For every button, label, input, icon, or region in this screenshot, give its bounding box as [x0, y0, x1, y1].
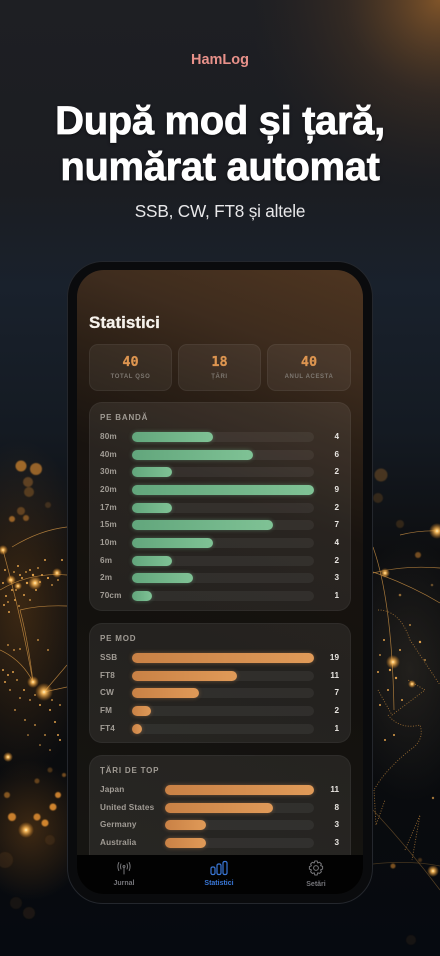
city dots: [2, 559, 434, 799]
panel: top countries: Australia: [100, 838, 136, 847]
panel: top countries: ȚĂRI DE TOP: [100, 766, 159, 775]
subtitle: SSB, CW, FT8 și altele: [135, 201, 305, 221]
icon: antenna: [117, 862, 131, 874]
panel: by mode: PE MOD: [100, 634, 136, 643]
stat card: this year: 40: [301, 354, 317, 370]
panel: by band: 70cm: [100, 591, 122, 600]
headline: numărat automat: [60, 145, 380, 189]
panel: by band: 6: [334, 450, 339, 459]
headline: [55, 99, 385, 189]
panel: by mode: FT8: [100, 671, 115, 680]
stat card: countries: [178, 344, 261, 391]
stat card: this year: ANUL ACESTA: [285, 374, 333, 380]
panel: by mode: 19: [330, 653, 339, 662]
stat card: total QSO: [89, 344, 172, 391]
panel: by band: 15m: [100, 520, 117, 529]
panel: by band: 2: [334, 503, 339, 512]
panel: by mode: FM: [100, 706, 112, 715]
tab: Statistici (active): Statistici: [204, 880, 234, 886]
stat card: total QSO: TOTAL QSO: [111, 374, 150, 380]
phone frame: [67, 261, 373, 904]
stat card: countries: 18: [211, 354, 228, 370]
panel: by band: 6m: [100, 556, 112, 565]
panel: top countries: 11: [330, 785, 339, 794]
panel: by band: 30m: [100, 467, 117, 476]
panel: by band: 1: [334, 591, 339, 600]
screen title: Statistici: [89, 313, 160, 332]
bokeh lights: [0, 460, 422, 945]
panel: by mode: 1: [334, 724, 339, 733]
panel: by mode: SSB: [100, 653, 117, 662]
panel: top countries: 3: [334, 820, 339, 829]
brand name: HamLog: [191, 52, 249, 68]
tab: Jurnal: Jurnal: [113, 880, 134, 886]
panel: top countries: Germany: [100, 820, 137, 829]
panel: by mode: [89, 623, 351, 743]
icon: gear: [308, 860, 324, 876]
panel: by band: 3: [334, 573, 339, 582]
tab: Statistici (active): [204, 860, 234, 886]
panel: by band: 2m: [100, 573, 112, 582]
tab: Jurnal: [113, 862, 134, 886]
panel: by mode: FT4: [100, 724, 115, 733]
panel: top countries: 3: [334, 838, 339, 847]
panel: by band: 4: [334, 538, 339, 547]
panel: by mode: 7: [334, 688, 339, 697]
panel: by mode: CW: [100, 688, 114, 697]
panel: by mode: 2: [334, 706, 339, 715]
panel: by band: PE BANDĂ: [100, 413, 148, 422]
tab bar: [77, 855, 363, 894]
icon: bar chart: [210, 860, 228, 876]
panel: by band: 4: [334, 432, 339, 441]
panel: top countries: United States: [100, 803, 154, 812]
panel: by band: 80m: [100, 432, 117, 441]
panel: by band: 9: [334, 485, 339, 494]
panel: by band: 2: [334, 556, 339, 565]
stat card: this year: [267, 344, 351, 391]
panel: by band: 7: [334, 520, 339, 529]
stat card: countries: ȚĂRI: [211, 374, 228, 380]
headline: După mod și țară,: [55, 99, 385, 143]
panel: top countries: [89, 755, 351, 855]
tab: Setari: [306, 860, 326, 888]
panel: top countries: Japan: [100, 785, 124, 794]
panel: top countries: 8: [334, 803, 339, 812]
panel: by band: 10m: [100, 538, 117, 547]
panel: by band: 40m: [100, 450, 117, 459]
tab: Setari: Setări: [306, 880, 326, 888]
panel: by band: 17m: [100, 503, 117, 512]
panel: by band: 2: [334, 467, 339, 476]
stat card: total QSO: 40: [122, 354, 139, 370]
panel: by band: [89, 402, 351, 611]
panel: by mode: 11: [330, 671, 339, 680]
panel: by band: 20m: [100, 485, 117, 494]
phone screen: [77, 270, 363, 894]
